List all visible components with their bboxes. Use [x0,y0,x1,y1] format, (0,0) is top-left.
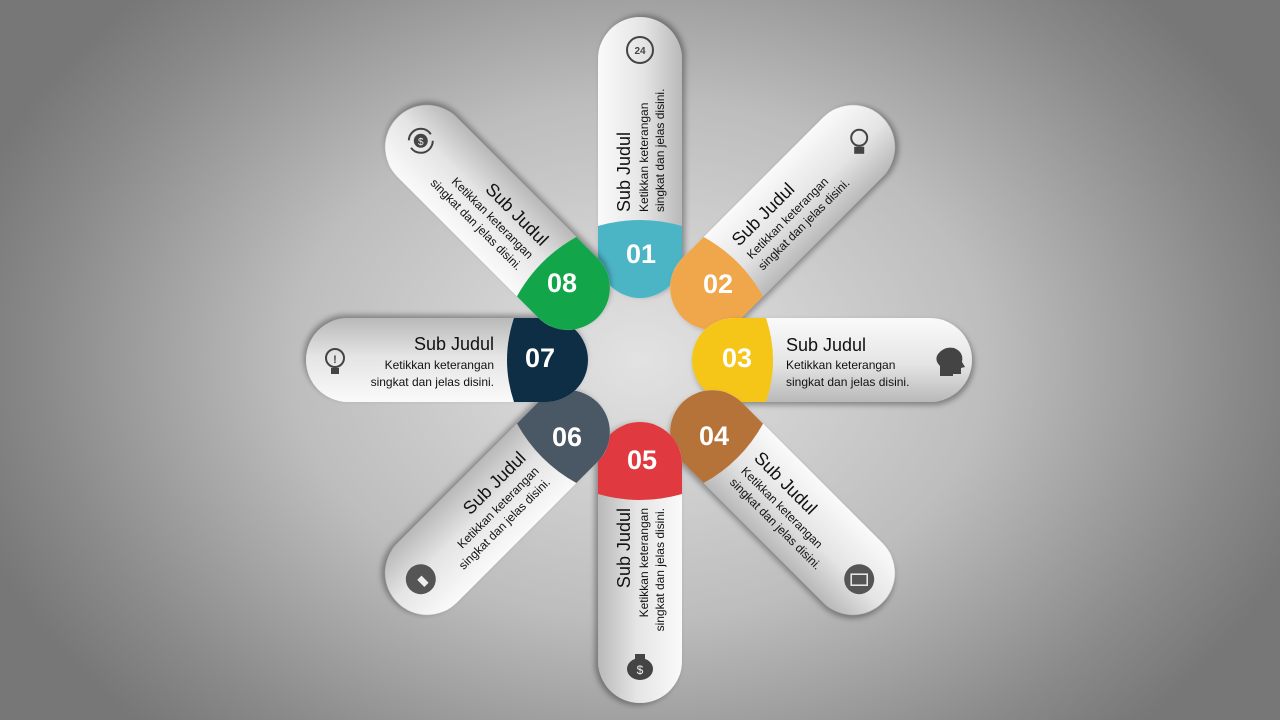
numbers: 01 [626,239,656,269]
pill 02: singkat dan jelas disini. [755,176,852,273]
pill 08 [368,88,627,347]
numbers: 08 [547,268,577,298]
numbers: 06 [552,422,582,452]
numbers: 02 [703,269,733,299]
pill 08: Ketikkan keterangan [449,174,536,262]
numbers [525,239,752,475]
pill 08: singkat dan jelas disini. [428,176,525,273]
pill 07: Ketikkan keterangan [385,358,494,372]
pill 01: singkat dan jelas disini. [653,89,667,212]
pill 04 [653,373,912,632]
numbers: 05 [627,445,657,475]
pill 04: singkat dan jelas disini. [727,475,824,572]
pill 05 [598,422,682,703]
pill 06 [368,373,627,632]
pill 02: Ketikkan keterangan [744,174,831,262]
pill 06: singkat dan jelas disini. [456,475,553,572]
pill 02: Sub Judul [728,179,798,250]
pill 04: Sub Judul [750,448,821,518]
pill 01 [598,17,682,298]
pill 03: Ketikkan keterangan [786,358,895,372]
numbers: 04 [699,421,729,451]
pill 03: singkat dan jelas disini. [786,375,909,389]
pill 03 [692,318,972,402]
pill 07: Sub Judul [414,334,494,354]
pill 08: Sub Judul [482,179,552,250]
pill 02 [653,88,912,347]
pill 05: singkat dan jelas disini. [653,508,667,631]
pill 06: Sub Judul [459,448,530,518]
pill 06: Ketikkan keterangan [454,464,542,551]
pill 07 [306,318,588,402]
pill 07: singkat dan jelas disini. [371,375,494,389]
pill 05: Sub Judul [614,508,634,588]
pill 03: Sub Judul [786,335,866,355]
pill 01: Ketikkan keterangan [637,103,651,212]
numbers: 07 [525,343,555,373]
pill 05: Ketikkan keterangan [637,508,651,617]
pill 04: Ketikkan keterangan [738,464,826,551]
pill 07: ! [333,354,337,366]
pill 01: 24 [634,46,646,57]
numbers: 03 [722,343,752,373]
pill 01: Sub Judul [614,132,634,212]
pill 08: $ [418,137,424,148]
pill 05: $ [637,663,644,677]
